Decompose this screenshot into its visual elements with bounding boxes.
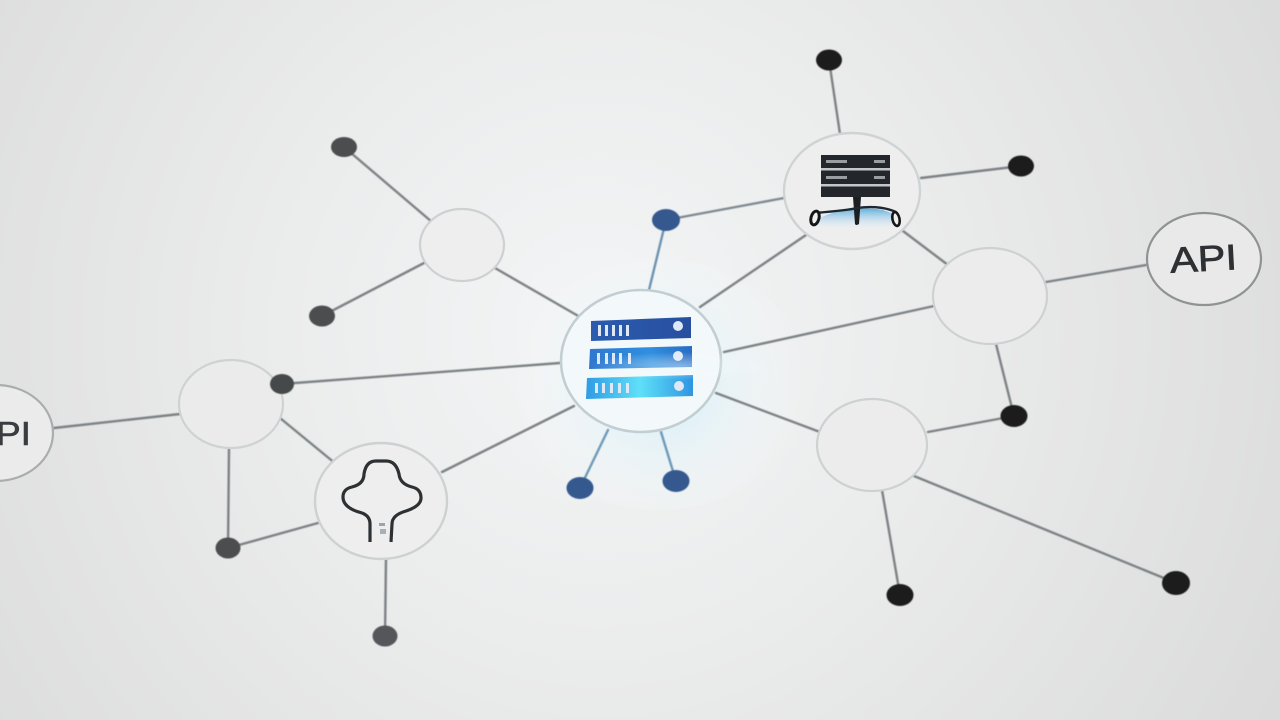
icon: dark server [809, 155, 901, 232]
icon: outline connector [343, 461, 421, 542]
empty node: right lower [817, 399, 927, 491]
leaf dots: black [816, 50, 1190, 606]
empty node: upper left [420, 209, 504, 281]
icon: server stack [586, 317, 693, 399]
hub node with server icon [561, 290, 721, 432]
API node: right [1147, 213, 1261, 305]
connector lines [54, 60, 1176, 636]
node with outline icon [315, 443, 447, 559]
empty node: left [179, 360, 283, 448]
light streak over hub [590, 352, 770, 380]
leaf dots: blue [566, 209, 690, 499]
node with dark server on stand [784, 133, 920, 249]
empty node: right upper [933, 248, 1047, 344]
leaf dots: grey [216, 137, 398, 646]
central glow [510, 260, 810, 510]
API node: left, cropped [0, 385, 53, 481]
API node: right: API [1169, 236, 1238, 281]
